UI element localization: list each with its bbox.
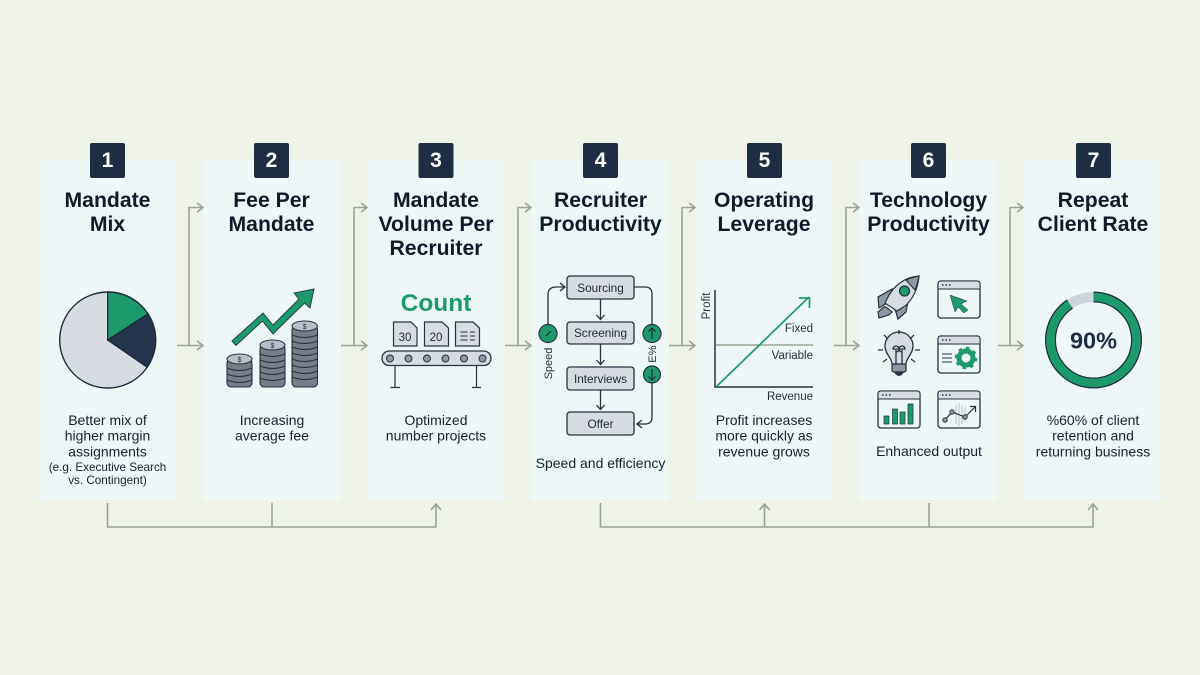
- icon: documents on conveyor: [382, 322, 491, 388]
- line chart: Profit: [701, 292, 713, 319]
- heading: recruiter productivity: Recruiter: [554, 189, 647, 212]
- step badge 1: [90, 143, 125, 178]
- step badge 5: [747, 143, 782, 178]
- description: number projects: [386, 428, 486, 444]
- panel: recruiter productivity: [532, 143, 668, 500]
- heading: operating leverage: Leverage: [717, 213, 811, 236]
- flow diagram: Offer: [587, 417, 614, 431]
- line chart: Revenue: [767, 391, 813, 403]
- icon: browser with bar chart: [878, 391, 920, 428]
- description: average fee: [235, 428, 309, 444]
- donut gauge: [1050, 297, 1136, 383]
- step badge 4: [583, 143, 618, 178]
- icon: coin stacks with rising arrow: [227, 289, 318, 387]
- icon: browser with line chart: [938, 391, 980, 428]
- arrow: 3 to 4: [505, 203, 531, 350]
- heading: recruiter productivity: Productivity: [539, 213, 662, 236]
- heading: repeat client rate: Repeat: [1058, 189, 1128, 212]
- panel: technology productivity: [860, 143, 996, 500]
- heading: mandate mix: Mix: [90, 213, 125, 236]
- description: retention and: [1052, 428, 1134, 444]
- icon: documents on conveyor: 20: [430, 332, 442, 344]
- icon: documents on conveyor: 30: [399, 332, 411, 344]
- flow diagram: Speed: [543, 348, 555, 379]
- heading: technology productivity: Productivity: [867, 213, 990, 236]
- arrow: 1 to 2: [177, 203, 203, 350]
- icon: browser with gear: [938, 336, 980, 373]
- donut gauge: 90%: [1070, 328, 1117, 354]
- step badge 2: [254, 143, 289, 178]
- flow diagram: [539, 276, 661, 435]
- description: revenue grows: [718, 443, 810, 459]
- description: Profit increases: [716, 412, 812, 428]
- line chart: Fixed: [785, 323, 813, 335]
- description: higher margin: [65, 428, 150, 444]
- step badge 3: 3: [430, 149, 442, 172]
- description: Increasing: [240, 412, 304, 428]
- panel: mandate mix: [40, 143, 175, 500]
- step badge 6: [911, 143, 946, 178]
- icon: browser with cursor: [938, 281, 980, 318]
- step badge 7: [1076, 143, 1111, 178]
- line chart: [701, 290, 813, 403]
- description: more quickly as: [715, 428, 813, 444]
- heading: mandate volume per recruiter: Mandate: [393, 189, 479, 212]
- heading: operating leverage: Operating: [714, 189, 814, 212]
- bottom connector: 1 and 2 to 3: [108, 503, 441, 527]
- description: assignments: [68, 443, 147, 459]
- heading: repeat client rate: Client Rate: [1038, 213, 1149, 236]
- step badge 6: 6: [923, 149, 934, 172]
- arrow: 6 to 7: [998, 203, 1023, 350]
- step badge 2: 2: [266, 149, 277, 172]
- heading: mandate mix: Mandate: [65, 189, 150, 212]
- heading: fee per mandate: Fee Per: [233, 189, 310, 212]
- icon: coin stacks with rising arrow: $: [271, 343, 275, 350]
- description: (e.g. Executive Search: [49, 461, 166, 474]
- flow diagram: Interviews: [574, 372, 627, 386]
- description: Enhanced output: [876, 443, 982, 459]
- line chart: Variable: [772, 350, 813, 362]
- heading: mandate volume per recruiter: Recruiter: [389, 237, 483, 260]
- flow diagram: Screening: [574, 326, 627, 340]
- icon: rocket: [878, 276, 919, 319]
- count label: Count: [401, 290, 471, 317]
- icon: light bulb: [878, 330, 920, 375]
- step badge 4: 4: [595, 149, 607, 172]
- description: [49, 412, 166, 487]
- arrow: 2 to 3: [341, 203, 367, 350]
- heading: mandate volume per recruiter: Volume Per: [378, 213, 494, 236]
- heading: technology productivity: Technology: [870, 189, 987, 212]
- arrow: 5 to 6: [834, 203, 859, 350]
- panel: fee per mandate: [204, 143, 340, 500]
- flow diagram: Sourcing: [577, 281, 624, 295]
- arrow: 4 to 5: [669, 203, 695, 350]
- description: vs. Contingent): [68, 474, 147, 487]
- panel: repeat client rate: [1024, 143, 1160, 500]
- step badge 5: 5: [759, 149, 771, 172]
- step badge 7: 7: [1088, 149, 1099, 172]
- icon: coin stacks with rising arrow: $: [238, 357, 242, 364]
- panel: mandate volume per recruiter: [368, 143, 503, 500]
- bottom connector: 4, 5, 6 to 7: [600, 503, 1098, 527]
- panel: operating leverage: [696, 143, 832, 500]
- description: %60% of client: [1047, 412, 1139, 428]
- icon: coin stacks with rising arrow: $: [303, 324, 307, 331]
- pie chart: [60, 292, 156, 388]
- description: Optimized: [404, 412, 468, 428]
- heading: fee per mandate: Mandate: [229, 213, 315, 236]
- step badge 1: 1: [102, 149, 114, 172]
- step badge 3: [418, 143, 454, 178]
- description: Speed and efficiency: [536, 455, 665, 471]
- flow diagram: E%: [647, 345, 659, 363]
- description: returning business: [1036, 443, 1150, 459]
- description: Better mix of: [68, 412, 147, 428]
